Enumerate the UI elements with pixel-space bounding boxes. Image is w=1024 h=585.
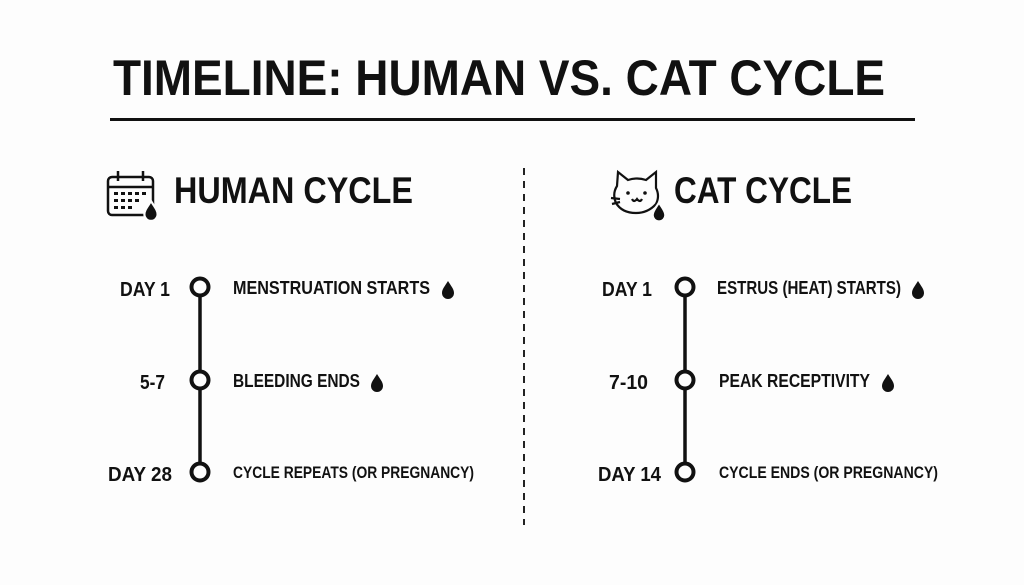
icon: calendar with drop	[108, 171, 158, 221]
timeline: cat: DAY 14	[598, 464, 662, 486]
icon: cat face with drop	[611, 172, 665, 221]
heading: cat cycle: CAT CYCLE	[674, 170, 852, 211]
timeline: cat: 7-10	[609, 372, 648, 394]
title: TIMELINE: HUMAN VS. CAT CYCLE	[113, 50, 885, 106]
panel: human cycle	[108, 170, 474, 486]
panel: cat cycle	[598, 170, 938, 486]
timeline: cat: PEAK RECEPTIVITY	[719, 371, 870, 391]
timeline: cat	[598, 278, 938, 486]
timeline: human: DAY 28	[108, 464, 172, 486]
timeline: human: CYCLE REPEATS (OR PREGNANCY)	[233, 463, 474, 482]
timeline: cat: DAY 1	[602, 279, 652, 301]
timeline: cat: ESTRUS (HEAT) STARTS)	[717, 278, 901, 298]
timeline: human	[108, 278, 474, 486]
timeline: human: DAY 1	[120, 279, 170, 301]
timeline: human: BLEEDING ENDS	[233, 371, 360, 391]
heading: human cycle: HUMAN CYCLE	[174, 170, 413, 211]
timeline: human: 5-7	[140, 372, 165, 394]
timeline: cat: CYCLE ENDS (OR PREGNANCY)	[719, 463, 938, 482]
timeline: human: MENSTRUATION STARTS	[233, 278, 430, 298]
